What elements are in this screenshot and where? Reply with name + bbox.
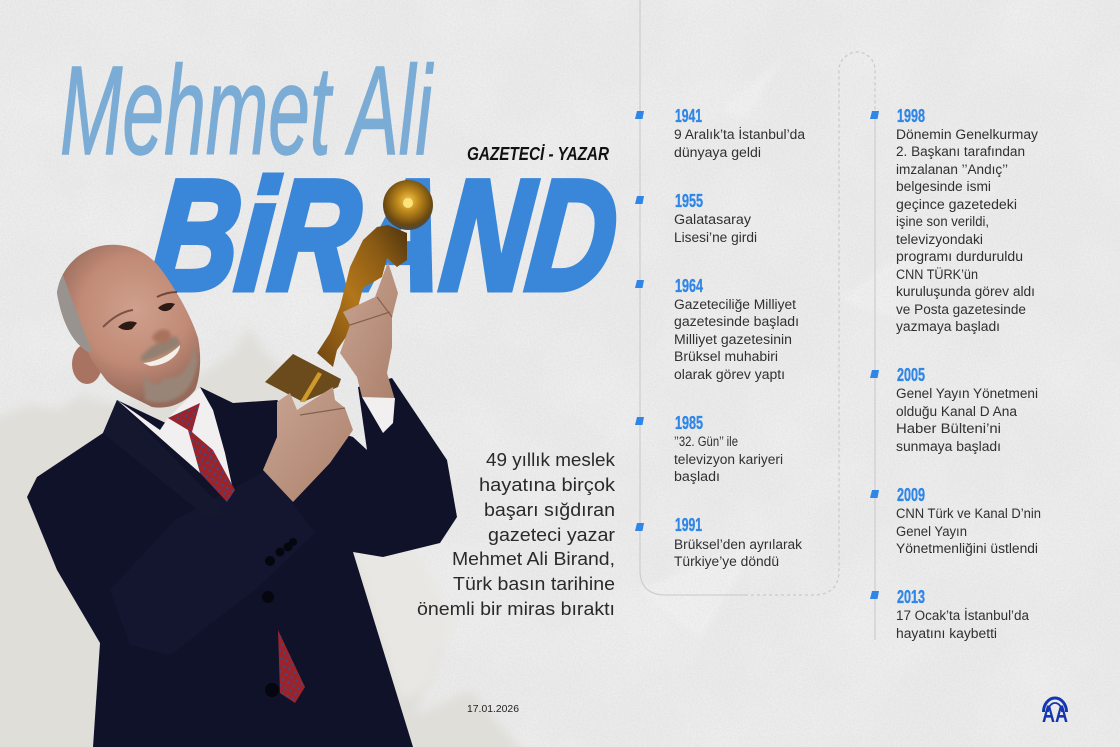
event: 1998: 2. Başkanı tarafından (896, 144, 1025, 159)
event: 1964: gazetesinde başladı (674, 314, 799, 329)
event: 1985 (635, 412, 783, 484)
event: 1941 (635, 105, 806, 160)
event: 1998: işine son verildi, (896, 214, 989, 229)
event: 1941: 1941 (675, 105, 702, 126)
raised hand (340, 262, 398, 400)
icon: AA logo: AA (1042, 701, 1068, 728)
summary text: başarı sığdıran (484, 499, 615, 520)
event: 1998: kuruluşunda görev aldı (896, 284, 1035, 299)
portrait: Mehmet Ali Birand holding a trophy (27, 180, 457, 747)
event: 1964: Gazeteciliğe Milliyet (674, 297, 796, 312)
event: 2013: hayatını kaybetti (896, 626, 997, 641)
event: 2005: Haber Bülteni’ni (896, 421, 1001, 436)
event: 1991: Türkiye’ye döndü (674, 554, 779, 569)
event: 1985: 1985 (675, 412, 703, 433)
front sleeve (110, 470, 315, 655)
jacket buttons (262, 538, 297, 697)
event: 1991: Brüksel’den ayrılarak (674, 537, 802, 552)
event: 2009: CNN Türk ve Kanal D’nin (896, 506, 1041, 521)
event: 1998: televizyondaki (896, 232, 983, 247)
date: 17.01.2026 (467, 703, 519, 715)
shirt and collar (117, 387, 233, 490)
event: 1998 (870, 105, 1038, 334)
summary text: önemli bir miras bıraktı (417, 598, 615, 619)
lower hand (263, 387, 353, 502)
summary text: Türk basın tarihine (453, 573, 615, 594)
event: 1998: CNN TÜRK’ün (896, 267, 978, 282)
timeline right column (870, 105, 1041, 641)
upper tie (168, 403, 235, 502)
event: 1955 (635, 190, 757, 245)
summary text: hayatına birçok (479, 474, 616, 495)
event: 2005 (870, 364, 1038, 454)
event: 2005: olduğu Kanal D Ana (896, 404, 1018, 419)
icon: AA logo (1042, 698, 1068, 728)
event: 1998: yazmaya başladı (896, 319, 1000, 334)
event: 1998: Dönemin Genelkurmay (896, 127, 1038, 142)
event: 2013 (870, 586, 1030, 641)
facial features (103, 292, 197, 402)
event: 1998: ve Posta gazetesinde (896, 302, 1026, 317)
event: 2013: 17 Ocak’ta İstanbul’da (896, 608, 1030, 623)
event: 1998: programı durduruldu (896, 249, 1023, 264)
event: 1941: dünyaya geldi (674, 145, 761, 160)
event: 1964 (635, 275, 799, 382)
summary text: gazeteci yazar (488, 524, 615, 545)
event: 1955: 1955 (675, 190, 703, 211)
event: 2005: 2005 (897, 364, 925, 385)
heading: BiRAND: BiRAND (144, 148, 625, 323)
summary text (417, 449, 616, 619)
event: 2005: Genel Yayın Yönetmeni (896, 386, 1038, 401)
finger creases (300, 297, 392, 415)
event: 1998: imzalanan ’’Andıç’’ (896, 162, 1008, 177)
event: 1985: ’’32. Gün’’ ile (674, 434, 738, 449)
event: 1998: belgesinde ismi (896, 179, 991, 194)
event: 1985: başladı (674, 469, 720, 484)
event: 1964: Milliyet gazetesinin (674, 332, 792, 347)
event: 1998: 1998 (897, 105, 925, 126)
event: 1998: geçince gazetedeki (896, 197, 1017, 212)
lapel shading (103, 400, 225, 520)
event: 1964: olarak görev yaptı (674, 367, 785, 382)
timeline left column (635, 105, 806, 569)
subtitle: Gazeteci - Yazar: GAZETECİ - YAZAR (467, 143, 610, 164)
summary text: 49 yıllık meslek (486, 449, 616, 470)
event: 1941: 9 Aralık’ta İstanbul’da (674, 127, 806, 142)
ear (72, 344, 102, 384)
summary text: Mehmet Ali Birand, (452, 548, 615, 569)
shirt cuff (362, 397, 395, 433)
event: 2009: Genel Yayın (896, 524, 967, 539)
event: 1991: 1991 (675, 514, 702, 535)
trophy (265, 180, 433, 402)
event: 2009 (870, 484, 1041, 556)
grey hair (57, 275, 92, 352)
suit (27, 378, 457, 747)
head (57, 245, 200, 408)
event: 2009: Yönetmenliğini üstlendi (896, 541, 1038, 556)
ink wash behind portrait (0, 328, 530, 747)
event: 2013: 2013 (897, 586, 925, 607)
timeline track (640, 0, 875, 640)
event: 2009: 2009 (897, 484, 925, 505)
lower tie (278, 630, 305, 703)
event: 1964: 1964 (675, 275, 703, 296)
event: 1964: Brüksel muhabiri (674, 349, 778, 364)
event: 2005: sunmaya başladı (896, 439, 1001, 454)
event: 1955: Galatasaray (674, 212, 751, 227)
heading: Mehmet Ali: Mehmet Ali (60, 40, 434, 181)
event: 1955: Lisesi’ne girdi (674, 230, 757, 245)
event: 1991 (635, 514, 802, 569)
event: 1985: televizyon kariyeri (674, 452, 783, 467)
